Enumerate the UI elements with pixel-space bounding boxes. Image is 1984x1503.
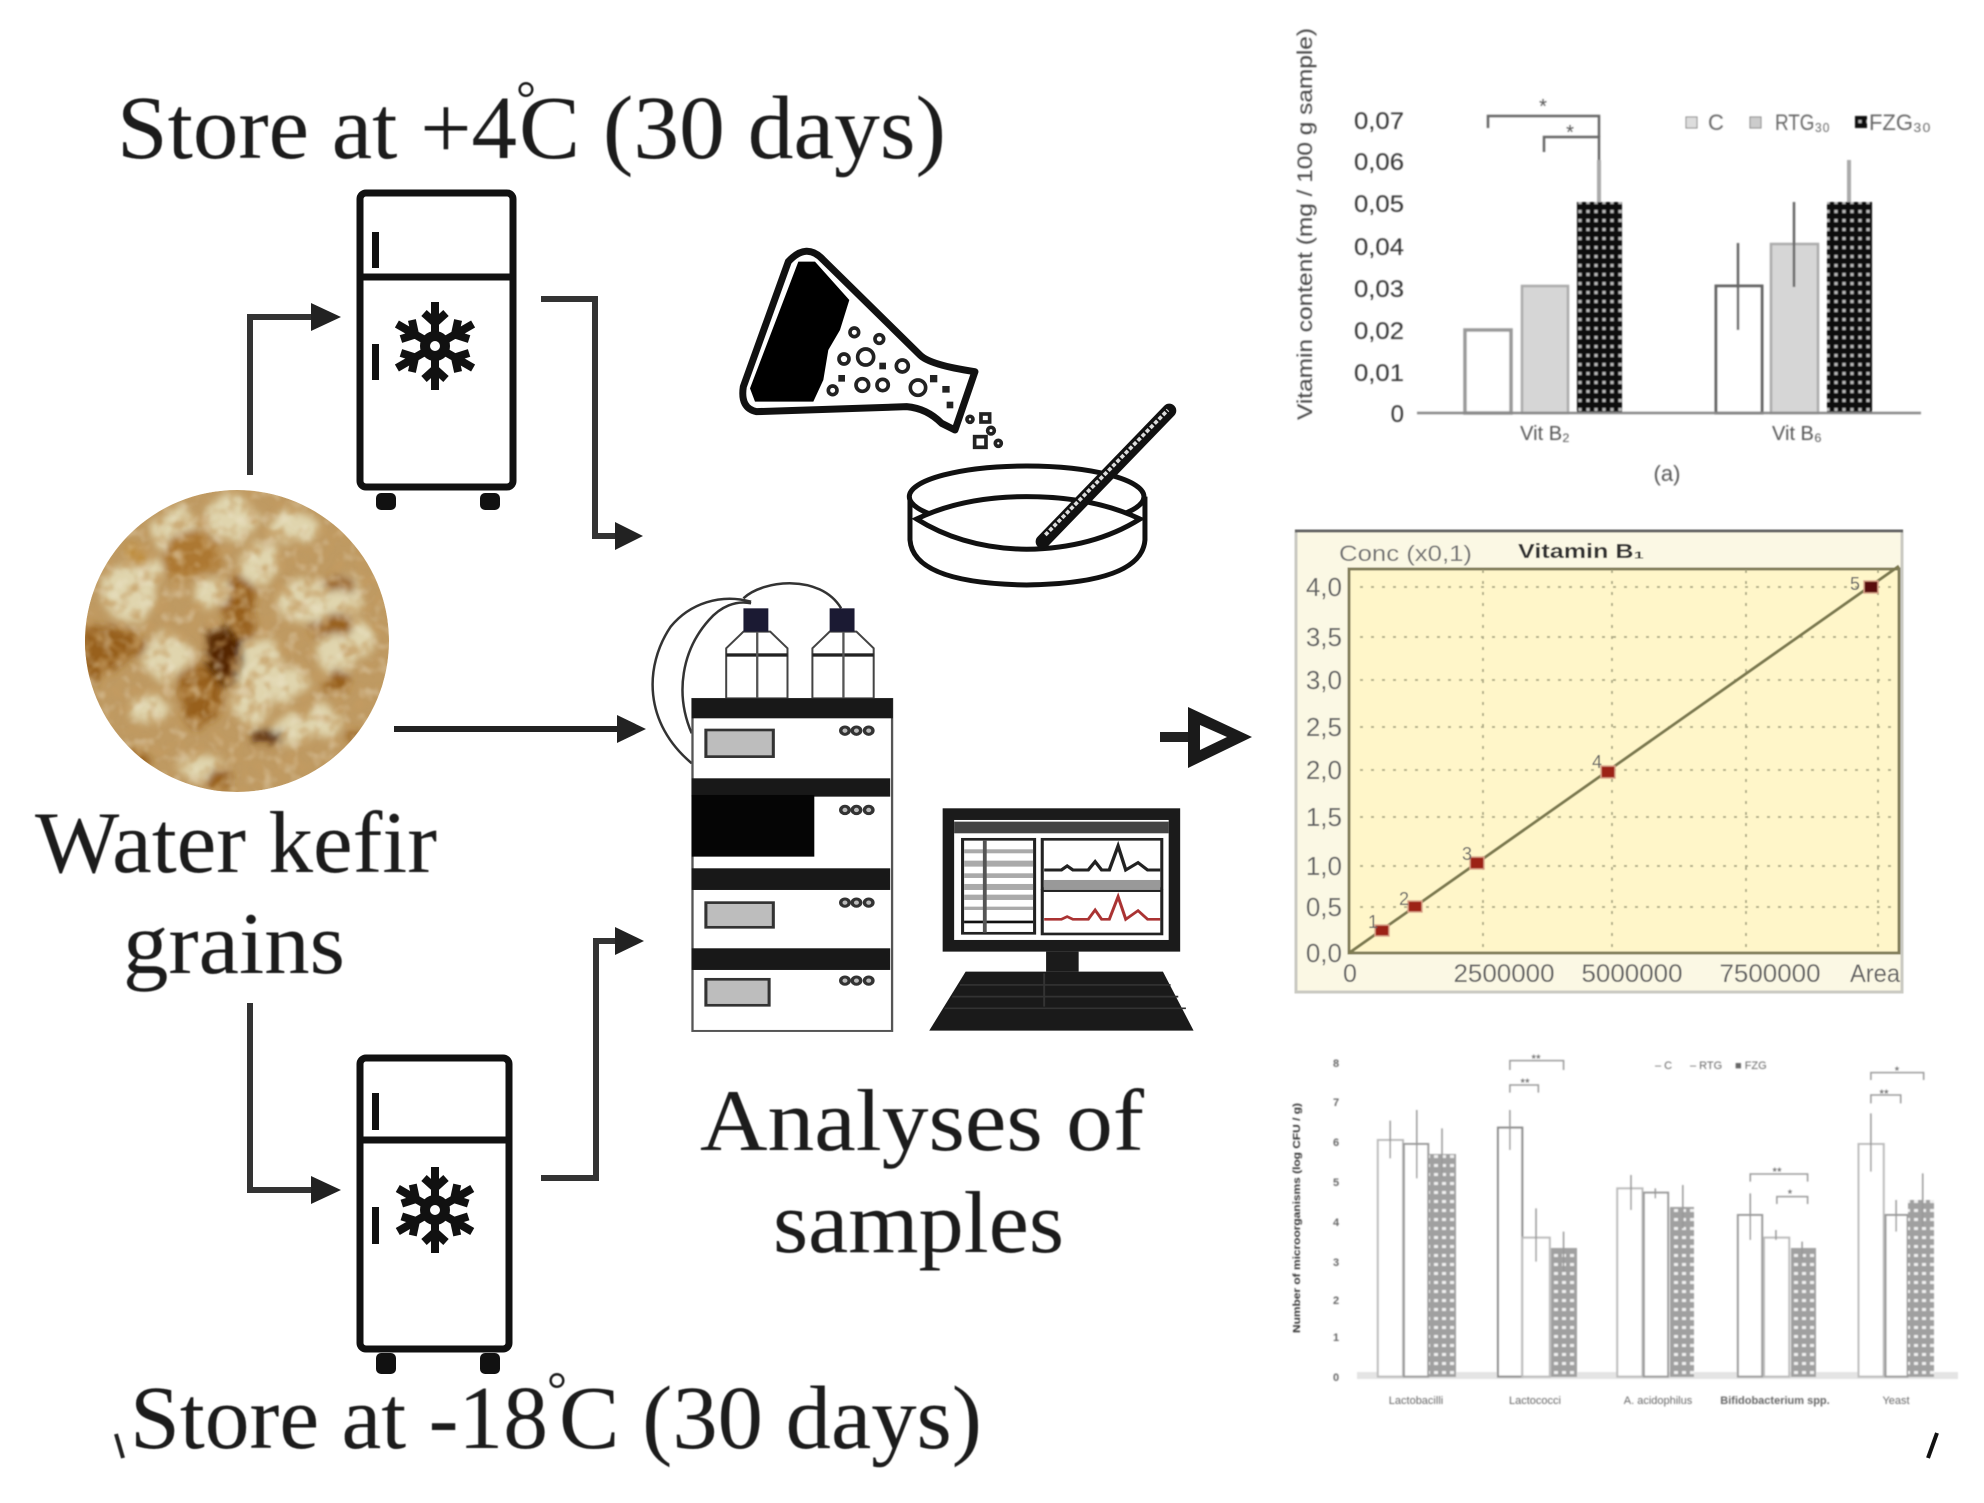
y axis ticks: 4: [1333, 1217, 1340, 1229]
point labels: 5: [1850, 574, 1860, 594]
point labels: 4: [1592, 752, 1602, 772]
label: analyses of samples: samples: [773, 1175, 1064, 1272]
significance stars: **: [1520, 1076, 1530, 1090]
title: store at +4 C: [117, 70, 946, 178]
label: analyses of samples: [700, 1073, 1145, 1272]
x axis labels: Lactobacilli: [1389, 1395, 1443, 1407]
image: water kefir grains: [77, 490, 389, 794]
mark: slash bottom right: [1928, 1433, 1937, 1458]
icon: refrigerator +4 C: [360, 193, 513, 510]
baseline: [1417, 412, 1921, 414]
legend: [1655, 1060, 1767, 1072]
x axis labels: 5000000: [1582, 960, 1682, 988]
title: store at +4 C: °: [516, 70, 536, 126]
point labels: 2: [1399, 889, 1409, 909]
y axis labels: 1,0: [1306, 851, 1342, 881]
title: store at -18 C: [116, 1361, 982, 1468]
significance brackets: [1488, 116, 1599, 160]
significance stars: **: [1531, 1052, 1541, 1066]
significance stars: [1520, 1052, 1900, 1201]
legend: – C: [1655, 1060, 1672, 1072]
y axis ticks: [1333, 1058, 1340, 1384]
y axis ticks: 5: [1333, 1177, 1339, 1189]
icon: refrigerator -18 C: [360, 1058, 509, 1374]
software table: [963, 839, 1162, 934]
x axis labels: 7500000: [1720, 960, 1820, 988]
arrow: grains to +4 C fridge: [250, 303, 341, 475]
chart: vitamin B1 calibration curve: [1295, 531, 1903, 992]
x axis labels: [1520, 423, 1822, 486]
tubing: [653, 583, 841, 763]
bars: [1465, 330, 1511, 413]
label: water kefir grains: [35, 795, 437, 993]
chart titles: Conc (x0,1): [1339, 541, 1472, 566]
y axis ticks: 0,05: [1354, 191, 1404, 218]
x axis labels: Yeast: [1882, 1395, 1910, 1407]
point labels: 1: [1368, 912, 1378, 932]
stack body: [692, 699, 892, 1031]
x axis labels: Vit B₆: [1772, 423, 1822, 445]
y axis label: Vitamin content (mg / 100 g sample): [1294, 28, 1317, 420]
y axis labels: 2,0: [1306, 755, 1342, 785]
icon: snowflake: [391, 302, 479, 390]
legend: RTG₃₀: [1775, 110, 1830, 135]
x axis labels: Area: [1850, 960, 1900, 988]
y axis labels: 3,0: [1306, 665, 1342, 695]
arrow: +4 C fridge to culture: [541, 299, 643, 550]
hatched bars: [1429, 1154, 1934, 1377]
grid: [1360, 570, 1898, 952]
x axis labels: 2500000: [1454, 960, 1554, 988]
y axis labels: 0,5: [1306, 892, 1342, 922]
chart: vitamin content bars: *: [1566, 122, 1574, 144]
y axis ticks: 2: [1333, 1295, 1339, 1307]
title: store at +4 C: C (30 days): [519, 79, 946, 178]
arrow: grains to -18 C fridge: [250, 1003, 341, 1204]
legend: ■ FZG: [1735, 1060, 1767, 1072]
y axis ticks: 0,03: [1354, 276, 1404, 303]
y axis ticks: 1: [1333, 1332, 1339, 1344]
chromatogram traces: [1044, 846, 1160, 870]
x axis labels: Lactococci: [1509, 1395, 1561, 1407]
icon: flask pouring culture: [743, 251, 1001, 447]
arrow: -18 C fridge to analyses: [541, 927, 644, 1178]
y axis ticks: 8: [1333, 1058, 1339, 1070]
baseline band: [1357, 1372, 1958, 1379]
legend: FZG₃₀: [1869, 110, 1931, 135]
point labels: [1368, 574, 1860, 932]
solvent bottles: [726, 632, 874, 698]
x axis labels: Bifidobacterium spp.: [1720, 1395, 1830, 1407]
bars: [1378, 1128, 1908, 1377]
y axis labels: 2,5: [1306, 712, 1342, 742]
label: water kefir grains: Water kefir: [35, 795, 437, 892]
arrow: analyses to results: [1160, 707, 1252, 768]
title: store at -18 C: C (30 days): [559, 1369, 982, 1468]
y axis label: Number of microorganisms (log CFU / g): [1292, 1103, 1303, 1333]
label: water kefir grains: grains: [123, 896, 345, 993]
title: store at +4 C: Store at +4: [117, 79, 517, 178]
y axis labels: 4,0: [1306, 572, 1342, 602]
icon: snowflake: [392, 1167, 478, 1253]
label: analyses of samples: Analyses of: [700, 1073, 1145, 1170]
x axis labels: Vit B₂: [1520, 423, 1570, 445]
chart: microbial counts bars: [1292, 1052, 1958, 1407]
x axis labels: (a): [1654, 461, 1680, 486]
arrow: grains to analyses: [394, 715, 646, 743]
y axis ticks: 0,06: [1354, 149, 1404, 176]
status buttons: [841, 727, 873, 984]
point labels: 3: [1462, 844, 1472, 864]
x axis labels: [1389, 1395, 1910, 1407]
title: store at -18 C: °: [547, 1361, 567, 1417]
y axis ticks: 0: [1391, 401, 1404, 428]
error bars and brackets: [1390, 1061, 1924, 1272]
chart: vitamin content bars: [1294, 28, 1931, 486]
error bars: [1599, 160, 1849, 202]
chart: vitamin B1 calibration curve: Vitamin B₁: [1518, 541, 1644, 563]
icon: HPLC instrument stack: [653, 583, 893, 1031]
significance stars: *: [1895, 1064, 1900, 1078]
x axis labels: A. acidophilus: [1624, 1395, 1693, 1407]
chart: vitamin content bars: *: [1539, 96, 1547, 118]
y axis ticks: 0,07: [1354, 108, 1404, 135]
title: store at -18 C: Store at -18: [130, 1369, 548, 1468]
calibration line: [1349, 566, 1899, 953]
data points: [1375, 581, 1878, 936]
y axis labels: 0,0: [1306, 938, 1342, 968]
y axis ticks: [1354, 108, 1404, 428]
y axis ticks: 0,02: [1354, 318, 1404, 345]
icon: computer with chromatograms: [929, 808, 1194, 1031]
significance stars: **: [1772, 1165, 1782, 1179]
x axis labels: [1343, 960, 1900, 988]
y axis ticks: 3: [1333, 1257, 1339, 1269]
y axis ticks: 0: [1333, 1372, 1339, 1384]
x axis labels: 0: [1343, 960, 1357, 988]
significance stars: **: [1879, 1087, 1889, 1101]
y axis ticks: 6: [1333, 1137, 1339, 1149]
icon: petri dish with spatula: [909, 410, 1169, 585]
y axis ticks: 0,04: [1354, 234, 1404, 261]
significance stars: *: [1788, 1187, 1793, 1201]
legend: C: [1708, 110, 1724, 135]
y axis ticks: 0,01: [1354, 360, 1404, 387]
y axis ticks: 7: [1333, 1097, 1339, 1109]
legend: [1686, 110, 1931, 135]
y axis labels: 1,5: [1306, 802, 1342, 832]
y axis labels: 3,5: [1306, 622, 1342, 652]
legend: – RTG: [1690, 1060, 1722, 1072]
y axis labels: [1306, 572, 1342, 968]
